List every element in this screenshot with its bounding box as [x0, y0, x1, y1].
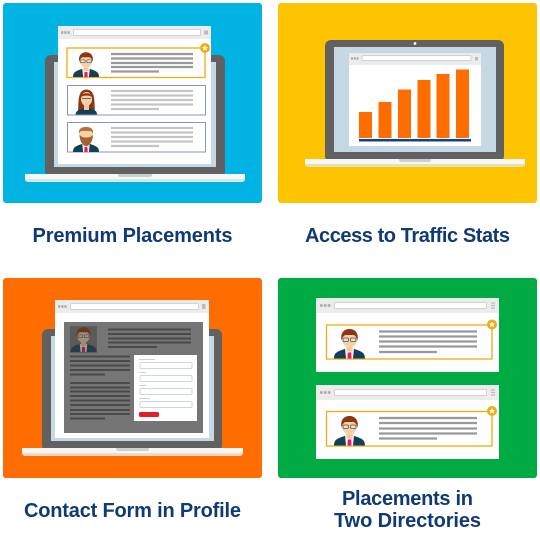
laptop: [305, 40, 525, 167]
panel: contact form: [3, 278, 262, 478]
bar chart: [359, 70, 471, 142]
browser window: second directory: [316, 385, 499, 459]
panel: traffic stats: [278, 3, 537, 203]
laptop: [22, 329, 243, 456]
browser window: [55, 300, 209, 438]
listing: [326, 406, 497, 446]
browser window: [58, 26, 211, 164]
browser window: first directory: [316, 298, 499, 372]
listing: [326, 320, 497, 359]
laptop: [25, 55, 245, 182]
heading: placements in two directories: Placements in: [342, 488, 473, 510]
heading: access to traffic stats: Access to Traffic Stats: [305, 225, 510, 247]
heading: premium placements: Premium Placements: [32, 225, 232, 247]
heading: contact form in profile: Contact Form in Profile: [24, 500, 241, 522]
listing: woman: [68, 86, 206, 115]
heading: placements in two directories: [334, 488, 481, 532]
contact form: [134, 355, 197, 421]
listing: highlighted: [67, 43, 210, 78]
profile photo: [70, 326, 97, 352]
heading: placements in two directories: Two Directories: [334, 510, 481, 532]
listing: bearded man: [68, 122, 206, 152]
dimmed profile page: [64, 322, 203, 433]
browser window: [349, 53, 481, 146]
panel: premium placements: [3, 3, 262, 203]
panel: two directories: [278, 278, 537, 478]
